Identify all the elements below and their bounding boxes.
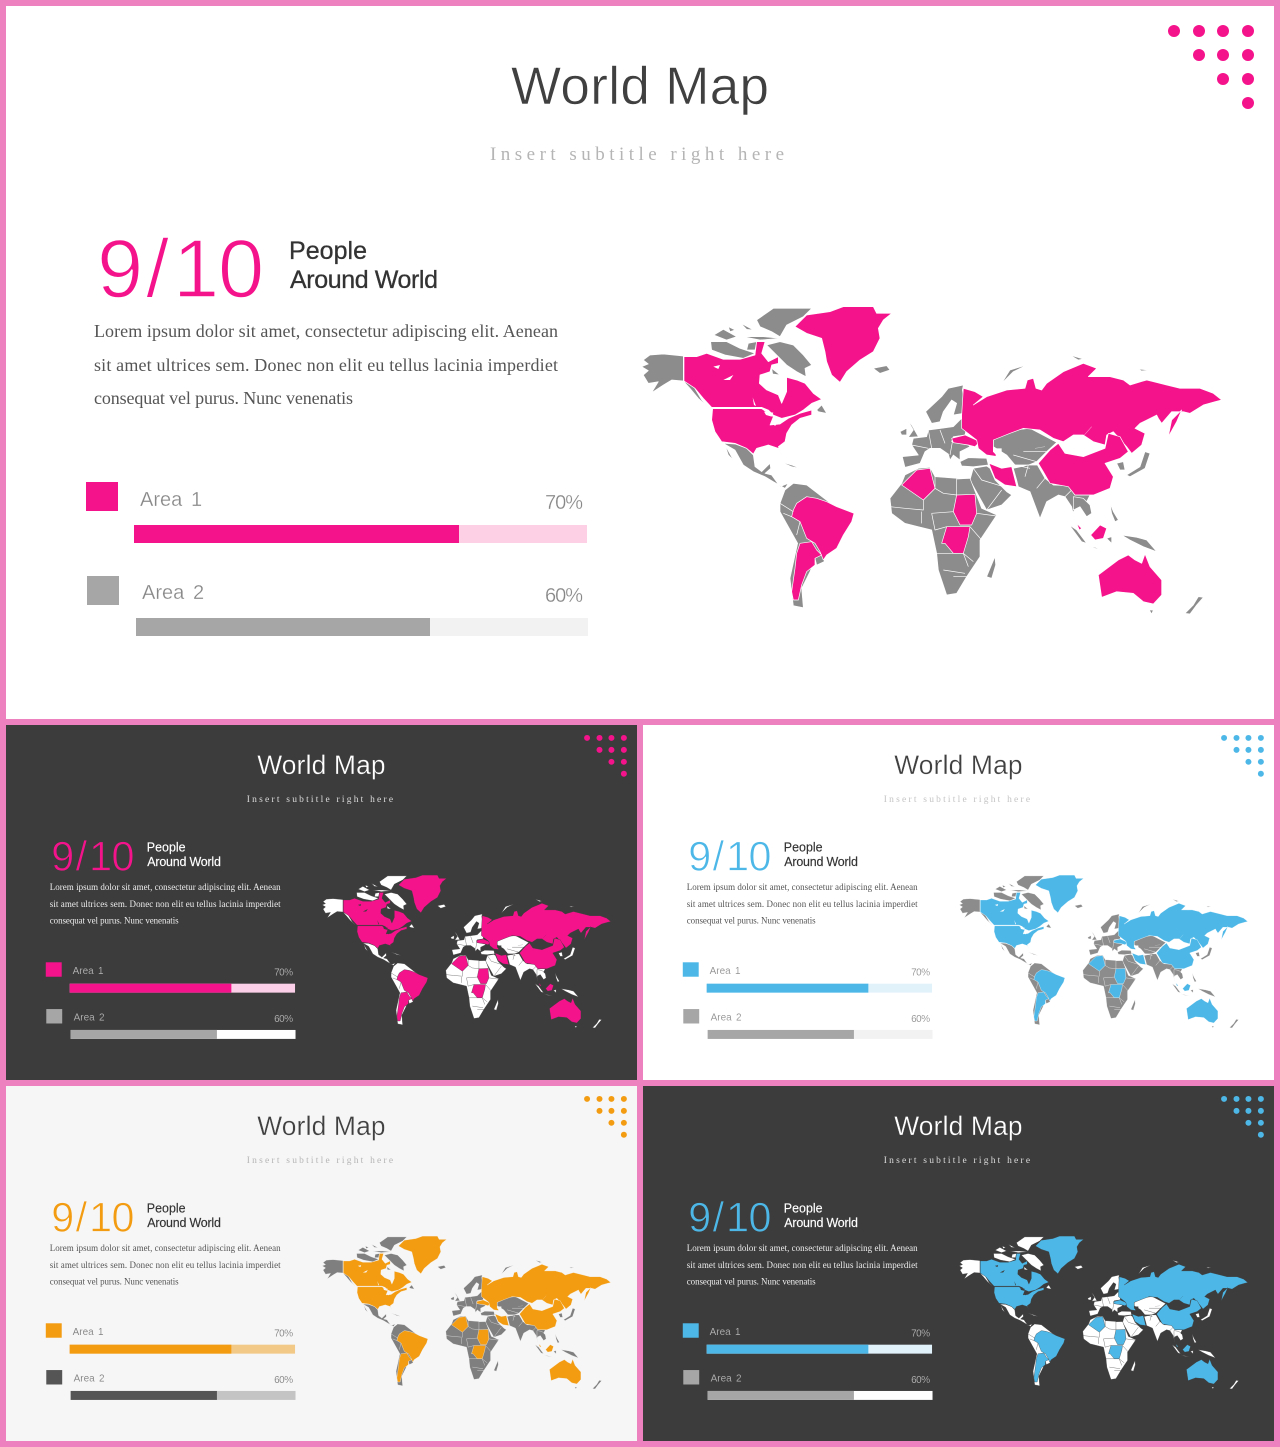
statistic caption: People [784, 1201, 823, 1215]
body text: Lorem ipsum dolor sit amet, consectetur adipiscing elit. Aenean [94, 321, 558, 341]
legend: area 2: 60% [274, 1014, 293, 1025]
body text: sit amet ultrices sem. Donec non elit eu tellus lacinia imperdiet [687, 1260, 918, 1270]
panel: white slide with blue accent [643, 725, 1274, 1080]
body text [50, 1243, 281, 1286]
panel: light grey slide with orange accent [6, 1086, 637, 1441]
legend: area 1 [46, 1323, 295, 1354]
subtitle: Insert subtitle right here [247, 1156, 393, 1166]
big statistic 9/10: 9/10 [51, 833, 134, 879]
legend: area 1: 70% [911, 968, 930, 979]
legend: area 2 [46, 1370, 296, 1400]
statistic caption: People [147, 840, 186, 854]
statistic caption [784, 1201, 858, 1230]
legend: area 1: 70% [274, 968, 293, 979]
title: World Map [257, 750, 386, 780]
statistic caption: People [784, 840, 823, 854]
body text: sit amet ultrices sem. Donec non elit eu tellus lacinia imperdiet [50, 899, 281, 909]
body text: consequat vel purus. Nunc venenatis [687, 915, 816, 925]
legend: area 2 [87, 576, 588, 636]
legend: area 2: 60% [911, 1375, 930, 1386]
legend: area 2: 2 [99, 1013, 105, 1024]
legend: area 2: 2 [736, 1013, 742, 1024]
legend: area 1: 1 [735, 1327, 741, 1338]
map: Europe, Africa and the Middle East [890, 385, 1017, 595]
body text: consequat vel purus. Nunc venenatis [50, 1276, 179, 1286]
legend: area 1 [683, 1323, 932, 1354]
panel: dark slide with pink accent [6, 725, 637, 1080]
statistic caption [147, 840, 221, 869]
title: World Map [511, 57, 769, 116]
legend: area 1: Area [73, 966, 94, 977]
big statistic 9/10: 9/10 [688, 1194, 771, 1240]
statistic caption: Around World [784, 1216, 858, 1230]
legend: area 2: Area [142, 582, 184, 604]
statistic caption: Around World [147, 855, 221, 869]
statistic caption [289, 237, 438, 294]
legend: area 1: 70% [274, 1329, 293, 1340]
big statistic 9/10: 9/10 [688, 833, 771, 879]
body text: sit amet ultrices sem. Donec non elit eu tellus lacinia imperdiet [50, 1260, 281, 1270]
legend: area 2: Area [74, 1374, 95, 1385]
legend: area 1: 70% [911, 1329, 930, 1340]
legend: area 2: Area [711, 1374, 732, 1385]
legend: area 1 [46, 962, 295, 993]
panel: dark slide with blue accent [643, 1086, 1274, 1441]
body text: Lorem ipsum dolor sit amet, consectetur adipiscing elit. Aenean [687, 1243, 918, 1253]
title: World Map [257, 1111, 386, 1141]
legend: area 1: Area [140, 489, 182, 511]
body text [50, 882, 281, 925]
legend: area 1: 1 [735, 966, 741, 977]
legend: area 1: Area [73, 1327, 94, 1338]
legend: area 2: 2 [736, 1374, 742, 1385]
map: Russia and Asia [962, 355, 1222, 522]
body text: sit amet ultrices sem. Donec non elit eu tellus lacinia imperdiet [687, 899, 918, 909]
statistic caption: People [147, 1201, 186, 1215]
big statistic 9/10: 9/10 [97, 222, 264, 315]
dot pattern [1168, 25, 1254, 109]
world map [959, 875, 1248, 1028]
legend: area 1: 1 [191, 489, 202, 511]
body text: Lorem ipsum dolor sit amet, consectetur adipiscing elit. Aenean [687, 882, 918, 892]
legend: area 1: 70% [545, 492, 583, 514]
subtitle: Insert subtitle right here [884, 795, 1030, 805]
legend: area 2 [683, 1370, 933, 1400]
title: World Map [894, 1111, 1023, 1141]
dot pattern [1221, 735, 1264, 777]
body text [687, 882, 918, 925]
world map [322, 875, 611, 1028]
legend: area 1: 1 [98, 966, 104, 977]
world map [322, 1236, 611, 1389]
statistic caption: Around World [784, 855, 858, 869]
subtitle: Insert subtitle right here [884, 1156, 1030, 1166]
statistic caption: People [289, 237, 367, 265]
title: World Map [894, 750, 1023, 780]
body text: consequat vel purus. Nunc venenatis [94, 388, 353, 408]
legend: area 1: 1 [98, 1327, 104, 1338]
body text: Lorem ipsum dolor sit amet, consectetur adipiscing elit. Aenean [50, 1243, 281, 1253]
legend: area 2: 60% [545, 585, 583, 607]
legend: area 1: Area [710, 1327, 731, 1338]
body text: Lorem ipsum dolor sit amet, consectetur adipiscing elit. Aenean [50, 882, 281, 892]
legend: area 2: Area [711, 1013, 732, 1024]
map: North America [642, 308, 827, 488]
panel: large pink and white slide [6, 6, 1274, 719]
statistic caption [147, 1201, 221, 1230]
legend: area 1: Area [710, 966, 731, 977]
body text: sit amet ultrices sem. Donec non elit eu tellus lacinia imperdiet [94, 355, 558, 375]
subtitle: Insert subtitle right here [247, 795, 393, 805]
legend: area 2: 60% [274, 1375, 293, 1386]
body text [94, 321, 558, 408]
dot pattern [1221, 1096, 1264, 1138]
legend: area 2: 2 [99, 1374, 105, 1385]
map: Greenland and South America [780, 307, 892, 608]
legend: area 2: 2 [193, 582, 204, 604]
world map [959, 1236, 1248, 1389]
legend: area 2: 60% [911, 1014, 930, 1025]
statistic caption [784, 840, 858, 869]
dot pattern [584, 1096, 627, 1138]
legend: area 2 [46, 1009, 296, 1039]
legend: area 2: Area [74, 1013, 95, 1024]
body text: consequat vel purus. Nunc venenatis [50, 915, 179, 925]
body text [687, 1243, 918, 1286]
big statistic 9/10: 9/10 [51, 1194, 134, 1240]
dot pattern [584, 735, 627, 777]
statistic caption: Around World [290, 266, 438, 294]
map: South-East Asia and Oceania [1069, 497, 1203, 614]
legend: area 1 [683, 962, 932, 993]
body text: consequat vel purus. Nunc venenatis [687, 1276, 816, 1286]
subtitle: Insert subtitle right here [490, 144, 784, 165]
legend: area 2 [683, 1009, 933, 1039]
world map [642, 307, 1222, 614]
statistic caption: Around World [147, 1216, 221, 1230]
legend: area 1 [86, 482, 587, 543]
